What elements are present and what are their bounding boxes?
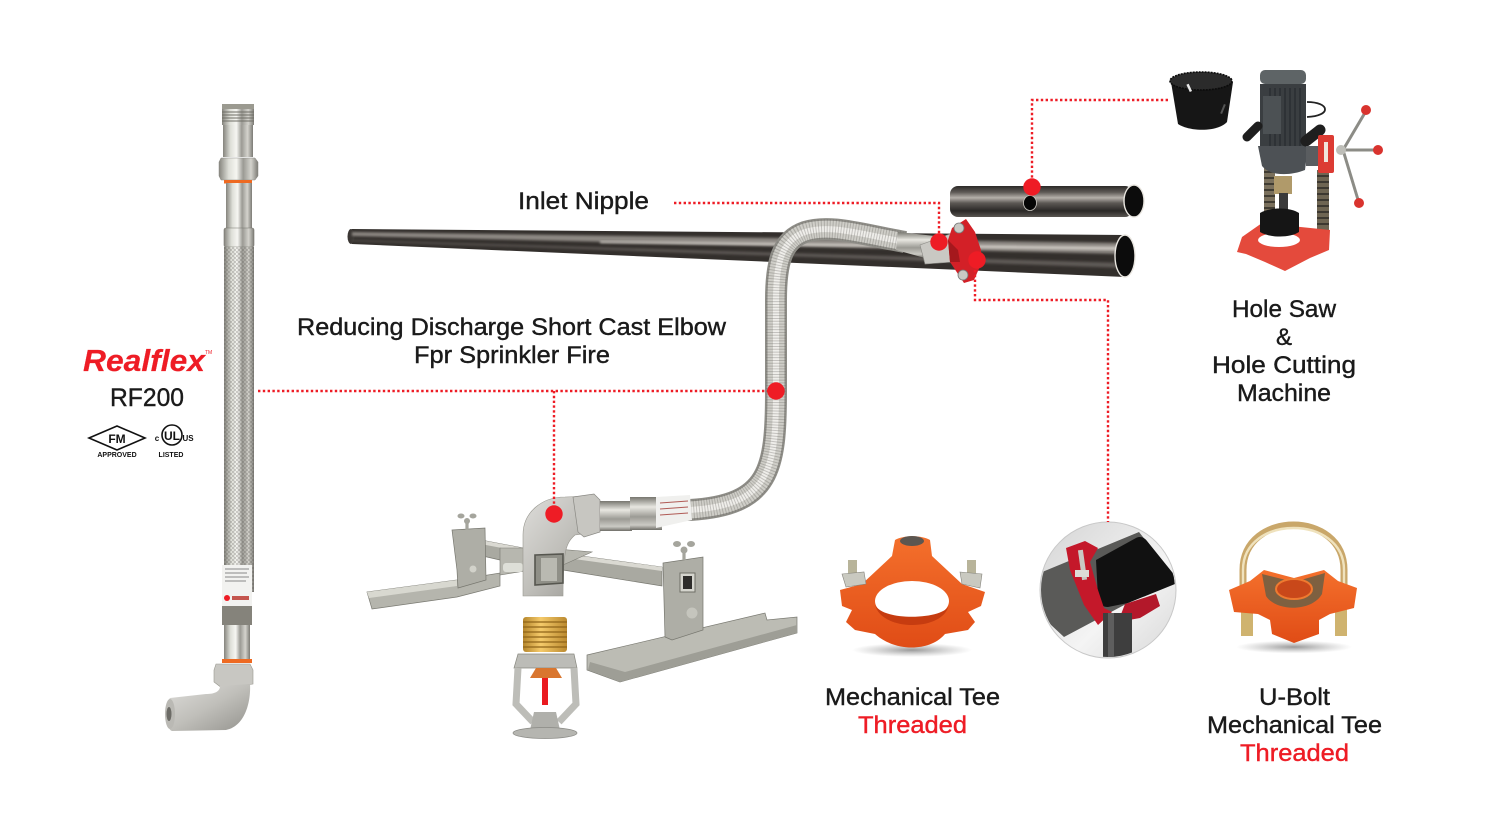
- marker dots: [545, 178, 1041, 523]
- model name: RF200: RF200: [110, 384, 184, 412]
- icon: FM approved: APPROVED: [97, 452, 137, 459]
- label: inlet nipple: Inlet Nipple: [518, 188, 649, 215]
- label: hole saw and machine: &: [1276, 324, 1292, 351]
- label: hole saw and machine: Hole Saw: [1232, 296, 1337, 323]
- product: U-bolt mechanical tee: [1229, 525, 1357, 654]
- icon: UL listed: LISTED: [159, 452, 183, 459]
- label: reducing discharge elbow: Fpr Sprinkler Fire: [414, 342, 610, 369]
- label: hole saw and machine: [1212, 296, 1356, 407]
- icon: UL listed: UL: [164, 429, 180, 443]
- sprinkler head: [513, 617, 577, 738]
- label: mechanical tee threaded: Threaded: [858, 712, 967, 739]
- hanger bracket assembly: [367, 494, 797, 682]
- label: mechanical tee threaded: Mechanical Tee: [825, 684, 1000, 711]
- connector: hole saw to pipe: [1032, 100, 1168, 187]
- flexible hose installed: [640, 229, 953, 510]
- inlet nipple pipe with hole: [950, 185, 1144, 217]
- main pipe: [348, 229, 1135, 277]
- hole saw: [1170, 72, 1233, 130]
- icon: UL listed: [155, 425, 194, 459]
- label: U-bolt mechanical tee threaded: Threaded: [1240, 740, 1349, 767]
- icon: UL listed: US: [182, 434, 194, 443]
- label: U-bolt mechanical tee threaded: Mechanical Tee: [1207, 712, 1382, 739]
- hole cutting machine: [1237, 70, 1383, 271]
- icon: UL listed: c: [155, 434, 160, 443]
- label: U-bolt mechanical tee threaded: [1207, 684, 1382, 767]
- inset: sectional view of tee on pipe: [1035, 522, 1180, 663]
- label: hole saw and machine: Machine: [1237, 380, 1331, 407]
- label: reducing discharge elbow: Reducing Discharge Short Cast Elbow: [297, 314, 727, 341]
- label: mechanical tee threaded: [825, 684, 1000, 739]
- icon: FM approved: [89, 426, 145, 459]
- logo: Realflex: Realflex: [83, 343, 207, 378]
- logo: Realflex: TM: [205, 350, 212, 356]
- product: Realflex RF200 flexible hose: [165, 104, 258, 731]
- product: mechanical tee: [840, 536, 985, 657]
- red mechanical tee on pipe: [948, 219, 981, 283]
- connector: elbow: [553, 391, 555, 514]
- connector: tee to inset: [975, 270, 1108, 522]
- icon: FM approved: FM: [108, 432, 126, 446]
- connector: inlet nipple: [674, 203, 939, 242]
- label: hole saw and machine: Hole Cutting: [1212, 352, 1356, 379]
- connector: hose to product: [258, 390, 776, 392]
- label: U-bolt mechanical tee threaded: U-Bolt: [1259, 684, 1330, 711]
- label: reducing discharge elbow: [297, 314, 727, 369]
